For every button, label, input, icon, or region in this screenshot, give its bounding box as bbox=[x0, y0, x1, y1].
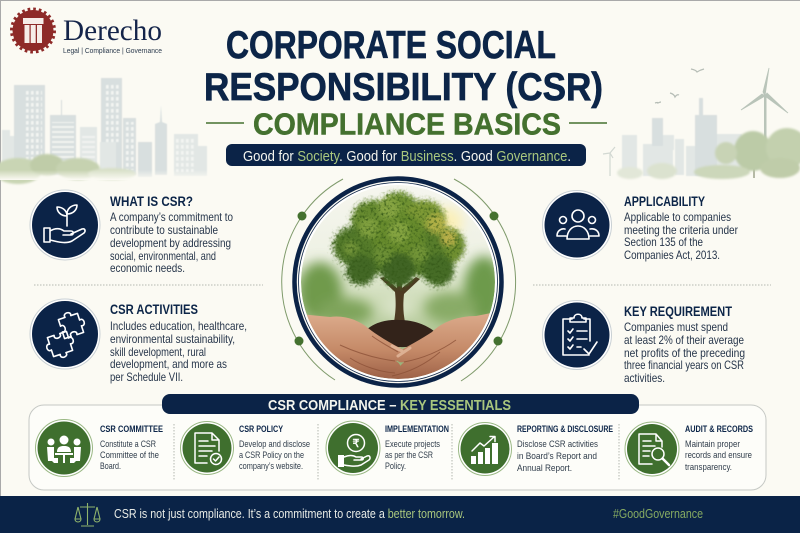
panel: what is CSR: contribute to sustainable bbox=[110, 223, 218, 237]
item: reporting and disclosure bbox=[458, 422, 613, 476]
birds bbox=[655, 69, 704, 103]
soil bbox=[365, 320, 434, 347]
photo ring bbox=[300, 184, 496, 380]
panel: applicability: meeting the criteria under bbox=[624, 223, 738, 237]
ground fade bbox=[0, 170, 800, 180]
panel: what is CSR bbox=[30, 190, 233, 275]
section heading pill: CSR COMPLIANCE – KEY ESSENTIALS bbox=[268, 398, 511, 414]
item: implementation: as per the CSR bbox=[385, 450, 433, 461]
icon: meeting table bbox=[36, 420, 92, 476]
finger creases and thumb highlights bbox=[340, 336, 456, 376]
panel: what is CSR: social, environmental, and bbox=[110, 249, 216, 263]
icon: document with check bbox=[180, 422, 234, 474]
footer band: #GoodGovernance bbox=[613, 506, 703, 521]
icon: puzzle pieces bbox=[30, 299, 100, 369]
panel: key requirement: KEY REQUIREMENT bbox=[624, 304, 733, 319]
panel: what is CSR: economic needs. bbox=[110, 261, 185, 275]
panel: key requirement: net profits of the preceding bbox=[624, 346, 745, 360]
item: audit and records: Maintain proper bbox=[685, 439, 740, 450]
item: reporting and disclosure: Annual Report. bbox=[517, 463, 572, 474]
section heading pill bbox=[162, 394, 639, 414]
item: implementation: Policy. bbox=[385, 461, 406, 472]
left hand bbox=[307, 314, 402, 378]
photo: tree and hands bbox=[301, 186, 495, 379]
panel: key essentials bbox=[29, 394, 766, 490]
title: RESPONSIBILITY (CSR) bbox=[204, 66, 603, 109]
panel: CSR activities: skill development, rural bbox=[110, 345, 206, 359]
item: audit and records bbox=[625, 422, 753, 476]
panel: key requirement: activities. bbox=[624, 371, 665, 385]
item: reporting and disclosure: Disclose CSR activities bbox=[517, 439, 598, 450]
item: CSR policy: a CSR Policy on the bbox=[239, 450, 304, 461]
panel: applicability: APPLICABILITY bbox=[624, 194, 705, 209]
icon: document with magnifier bbox=[625, 422, 679, 476]
small turbine bbox=[603, 147, 615, 176]
title bbox=[204, 24, 607, 142]
item: audit and records: records and ensure bbox=[685, 450, 752, 461]
title: COMPLIANCE BASICS bbox=[253, 106, 561, 142]
right city skyline with wind turbine bbox=[603, 68, 800, 179]
panel: CSR activities: CSR ACTIVITIES bbox=[110, 302, 198, 317]
panel: applicability: Section 135 of the bbox=[624, 235, 703, 249]
panel: CSR activities bbox=[30, 299, 247, 384]
item: implementation: Execute projects bbox=[385, 439, 440, 450]
outer arcs with dots bbox=[282, 179, 516, 381]
panel: CSR activities: environmental sustainability, bbox=[110, 332, 235, 346]
item: implementation bbox=[326, 421, 449, 475]
panel: key requirement bbox=[542, 300, 745, 385]
central tree in hands emblem bbox=[282, 178, 516, 386]
item: CSR committee: Constitute a CSR bbox=[100, 439, 156, 450]
item: CSR committee: Committee of the bbox=[100, 450, 159, 461]
panel: applicability: Companies Act, 2013. bbox=[624, 248, 720, 262]
icon: scales of justice bbox=[75, 503, 100, 526]
left trees bbox=[0, 154, 136, 184]
icon: checklist clipboard bbox=[542, 300, 612, 370]
panel: applicability: Applicable to companies bbox=[624, 210, 731, 224]
tagline pill: Good for Society. Good for Business. Good Governance. bbox=[243, 149, 571, 165]
item: CSR policy: CSR POLICY bbox=[239, 424, 283, 434]
panel: key requirement: at least 2% of their average bbox=[624, 333, 744, 347]
panel: what is CSR: A company’s commitment to bbox=[110, 210, 233, 224]
crown bbox=[333, 192, 465, 287]
item: CSR committee: Board. bbox=[100, 461, 121, 472]
item: CSR policy: Develop and disclose bbox=[239, 439, 310, 450]
item: reporting and disclosure: REPORTING & DISCLOSURE bbox=[517, 424, 613, 434]
panel: CSR activities: per Schedule VII. bbox=[110, 370, 183, 384]
item: implementation: IMPLEMENTATION bbox=[385, 424, 449, 434]
icon: rupee in hand: ₹ bbox=[352, 438, 360, 450]
item: CSR policy bbox=[180, 422, 310, 474]
item: reporting and disclosure: in Board’s Report and bbox=[517, 451, 597, 462]
item: CSR committee bbox=[36, 420, 163, 476]
panel: CSR activities: development, and more as bbox=[110, 357, 227, 371]
right hand bbox=[386, 313, 490, 379]
wind turbine bbox=[741, 68, 788, 113]
item: audit and records: transparency. bbox=[685, 462, 732, 473]
logo: Derecho bbox=[12, 10, 162, 55]
icon: hand with sprout bbox=[30, 190, 100, 260]
panel: what is CSR: WHAT IS CSR? bbox=[110, 194, 193, 209]
panel: key requirement: three financial years on CSR bbox=[624, 358, 744, 372]
panel: CSR activities: Includes education, healthcare, bbox=[110, 319, 247, 333]
item: audit and records: AUDIT & RECORDS bbox=[685, 424, 753, 434]
logo: Derecho: Derecho bbox=[63, 14, 162, 47]
footer band bbox=[0, 496, 800, 533]
logo: Derecho: Legal | Compliance | Governance bbox=[63, 48, 162, 55]
trunk bbox=[380, 277, 420, 320]
left city skyline bbox=[2, 78, 207, 177]
panel: applicability bbox=[542, 190, 738, 262]
panel: what is CSR: development by addressing bbox=[110, 236, 231, 250]
icon: people group bbox=[542, 190, 612, 260]
seal with pillar bbox=[12, 10, 54, 52]
icon: rising bar chart bbox=[458, 422, 512, 476]
item: CSR committee: CSR COMMITTEE bbox=[100, 424, 163, 434]
title: CORPORATE SOCIAL bbox=[226, 24, 556, 67]
item: CSR policy: company’s website. bbox=[239, 461, 303, 472]
tagline pill bbox=[226, 144, 586, 166]
panel: key requirement: Companies must spend bbox=[624, 320, 728, 334]
footer band: CSR is not just compliance. It’s a commitment to create a better tomorrow. bbox=[114, 506, 465, 521]
